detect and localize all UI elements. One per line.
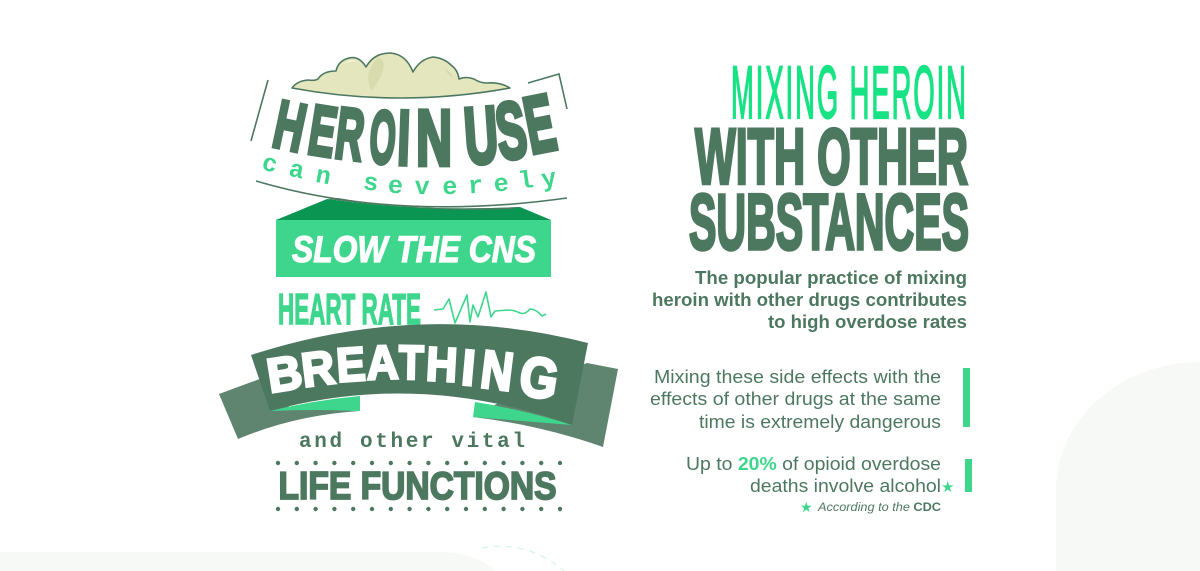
label: BREATHING xyxy=(263,335,563,413)
ribbon fold left xyxy=(270,396,360,411)
heading: HEROIN USE: N xyxy=(416,93,452,182)
text block: intro: heroin with other drugs contributes xyxy=(652,289,967,310)
label: SLOW THE CNS: SLOW THE CNS xyxy=(292,229,536,270)
banner shadow xyxy=(327,198,520,210)
panel: slow the CNS box xyxy=(276,220,551,277)
footnote: according to the CDC: ★ xyxy=(800,500,813,516)
text: can severely: e xyxy=(387,172,404,202)
text block: alcohol statistic: ★ xyxy=(941,478,954,496)
text block: side effects: effects of other drugs at the same xyxy=(650,389,941,409)
text: can severely: l xyxy=(517,166,536,197)
label: BREATHING: I xyxy=(459,340,478,397)
label: LIFE FUNCTIONS: LIFE FUNCTIONS xyxy=(278,465,556,508)
trapezoid top of CNS box xyxy=(276,199,551,220)
ribbon fold right xyxy=(473,402,572,425)
heading: HEROIN USE: E xyxy=(517,77,562,171)
label: BREATHING: N xyxy=(478,339,517,403)
label: BREATHING: H xyxy=(425,337,459,392)
ribbon main band xyxy=(251,324,588,425)
text: can severely: n xyxy=(313,161,333,192)
footnote: according to the CDC: According to the CDC xyxy=(817,500,941,514)
text block: intro: to high overdose rates xyxy=(768,311,967,332)
heading: HEROIN USE: O xyxy=(367,96,399,181)
text block: alcohol statistic: deaths involve alcohol xyxy=(750,476,941,496)
label: BREATHING: E xyxy=(335,337,367,392)
panel: heroin use illustration xyxy=(219,53,618,509)
title: mixing heroin with other substances xyxy=(689,50,969,266)
text: can severely: y xyxy=(539,164,559,195)
text: can severely xyxy=(259,149,559,202)
heading: HEROIN USE: R xyxy=(331,93,369,177)
text block: side effects xyxy=(650,367,941,432)
icon: heroin powder cloud xyxy=(292,53,510,98)
decorative dot rows xyxy=(278,463,562,509)
background shape: bottom right xyxy=(1056,362,1200,571)
background dashed arc xyxy=(482,546,564,571)
text block: alcohol statistic xyxy=(686,454,954,496)
label: BREATHING: B xyxy=(263,346,306,404)
text: can severely: e xyxy=(492,169,510,200)
text block: intro: The popular practice of mixing xyxy=(695,267,967,288)
heading: HEROIN USE xyxy=(267,77,562,182)
label: BREATHING: A xyxy=(366,335,399,390)
title line: MIXING HEROIN: MIXING HEROIN xyxy=(731,50,966,134)
text block: alcohol statistic: Up to 20% of opioid overdose xyxy=(686,454,941,474)
heading: HEROIN USE: E xyxy=(303,91,342,173)
text: can severely: a xyxy=(286,155,307,186)
heading: HEROIN USE: I xyxy=(396,96,412,182)
text block: side effects: time is extremely dangerous xyxy=(699,412,941,432)
accent bar: side effects xyxy=(963,368,970,427)
label: HEART RATE: HEART RATE xyxy=(278,285,421,334)
text block: intro xyxy=(652,267,967,332)
label: BREATHING: R xyxy=(298,340,338,397)
title line: WITH OTHER: WITH OTHER xyxy=(695,112,968,200)
text block: side effects: Mixing these side effects with the xyxy=(654,367,941,387)
text: can severely: s xyxy=(362,168,380,199)
label: BREATHING: G xyxy=(515,344,563,413)
ribbon back left xyxy=(219,377,360,439)
text: can severely: r xyxy=(467,172,484,201)
background shape: bottom left xyxy=(0,552,497,571)
heading: HEROIN USE: U xyxy=(461,90,501,181)
heading: HEROIN USE: H xyxy=(267,86,312,166)
heading: HEROIN USE: S xyxy=(490,84,532,177)
text: and other vital: and other vital xyxy=(299,431,525,454)
accent bar: alcohol statistic xyxy=(965,459,972,492)
text: can severely: v xyxy=(414,173,430,202)
text: can severely: e xyxy=(442,173,458,202)
banner frame lines xyxy=(251,74,567,207)
text: can severely: c xyxy=(259,149,281,181)
ribbon back right xyxy=(473,363,618,447)
icon: heartbeat line xyxy=(434,292,546,323)
label: BREATHING: T xyxy=(398,337,424,390)
ribbon: breathing xyxy=(219,324,618,447)
